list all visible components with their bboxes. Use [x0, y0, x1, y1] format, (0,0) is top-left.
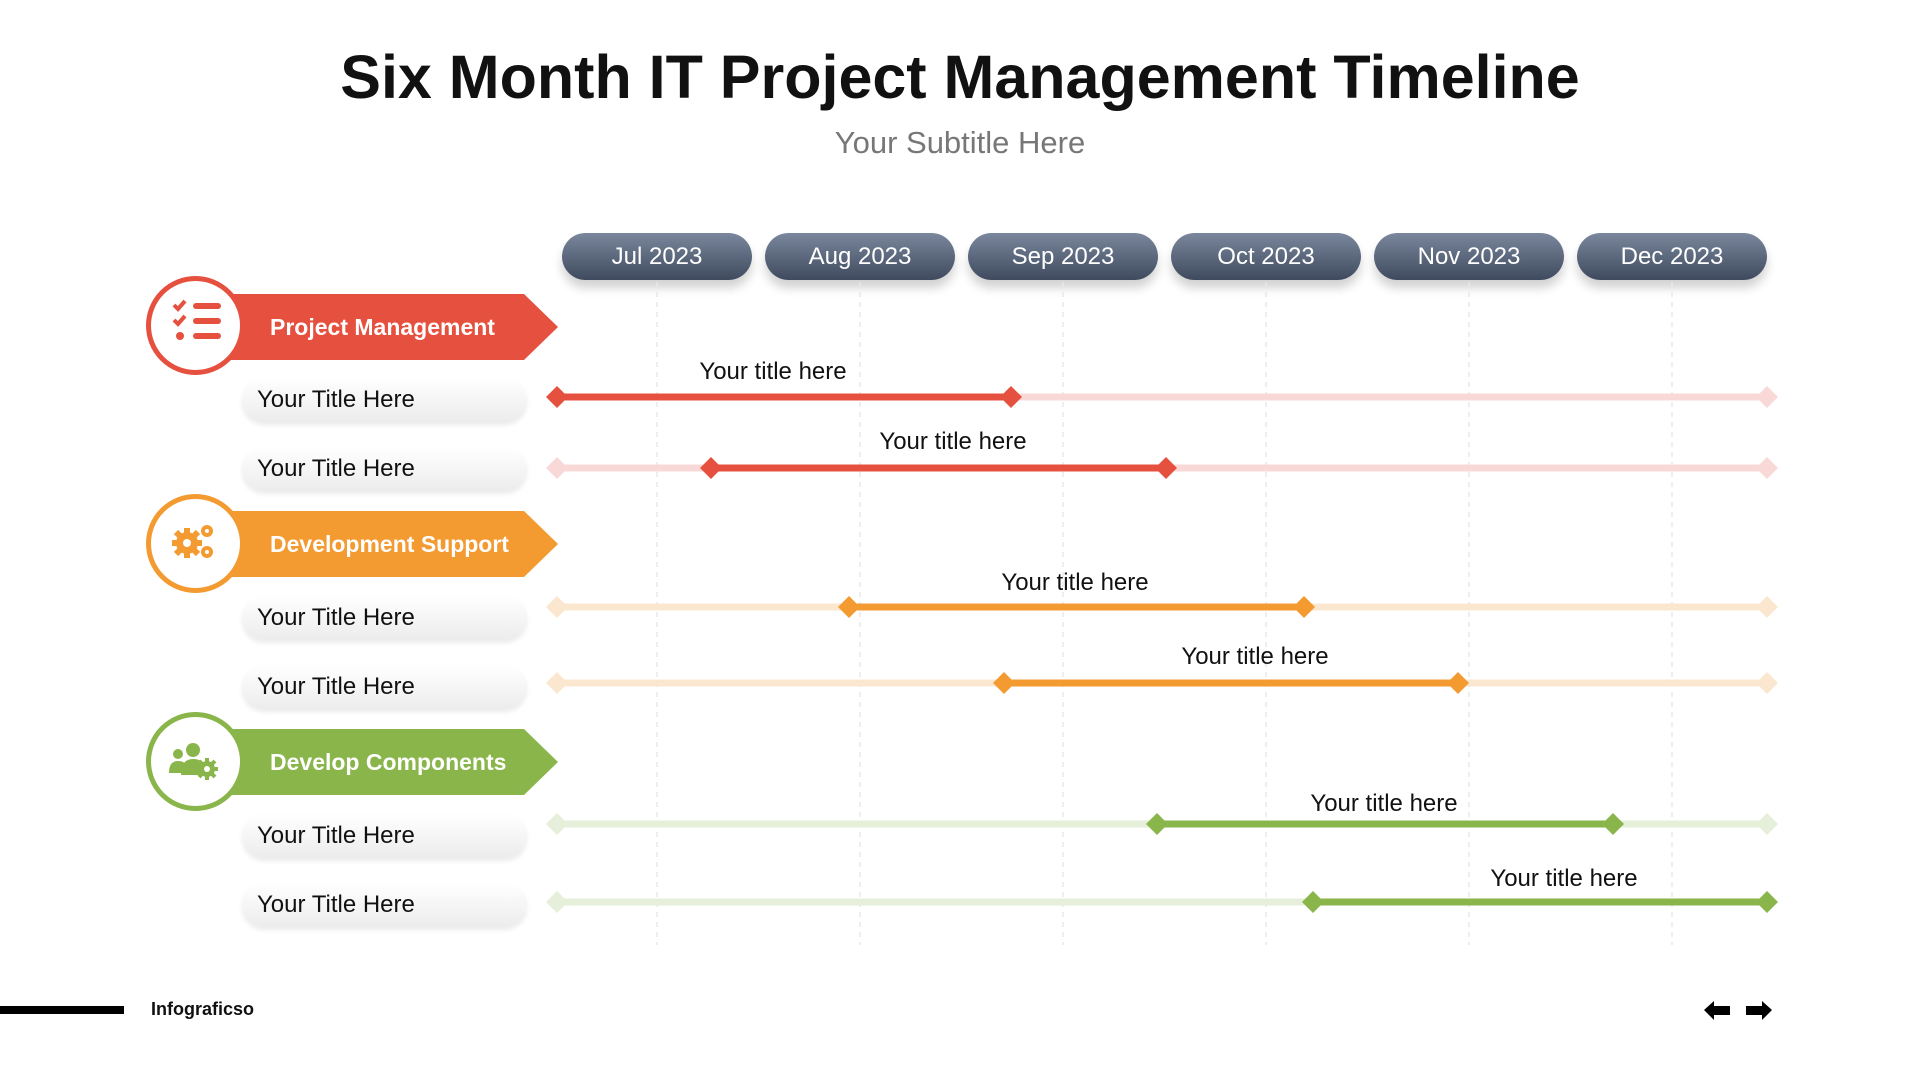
category: Develop Components — [146, 712, 558, 811]
bar: DS 2: Your title here — [1181, 643, 1329, 670]
row label PM1: Your Title Here — [257, 386, 415, 413]
icon: gears — [146, 494, 245, 593]
bar: DC 2: Your title here — [1490, 865, 1638, 892]
category: Development Support — [146, 494, 558, 593]
icon: checklist — [146, 276, 245, 375]
row label DS1: Your Title Here — [257, 604, 415, 631]
row label DS2 — [242, 665, 527, 709]
bar: PM 2 — [546, 428, 1778, 479]
category: Develop Components: Develop Components — [270, 749, 506, 775]
month headers: Oct 2023 — [1217, 243, 1315, 270]
title: Six Month IT Project Management Timeline — [340, 43, 1580, 111]
row label DC1: Your Title Here — [257, 822, 415, 849]
bar: DC 1 — [546, 790, 1778, 835]
bar: PM 1 — [546, 358, 1778, 408]
row label PM2 — [242, 447, 527, 491]
bar: DC 2 — [546, 865, 1778, 913]
bar: PM 1: Your title here — [699, 358, 847, 385]
category: Development Support: Development Support — [270, 531, 509, 557]
month headers: Sep 2023 — [1012, 243, 1114, 270]
month headers: Aug 2023 — [809, 243, 911, 270]
category: Project Management: Project Management — [270, 314, 495, 340]
row label DC2: Your Title Here — [257, 891, 415, 918]
month headers: Jul 2023 — [612, 243, 702, 270]
bar: PM 2: Your title here — [879, 428, 1027, 455]
bar: DC 1: Your title here — [1310, 790, 1458, 817]
month headers: Dec 2023 — [1621, 243, 1723, 270]
footer bar — [0, 1006, 124, 1014]
row label DC2 — [242, 883, 527, 927]
subtitle: Your Subtitle Here — [835, 125, 1085, 160]
bar: DS 2 — [546, 643, 1778, 694]
bar: DS 1: Your title here — [1001, 569, 1149, 596]
icon: team gear — [146, 712, 245, 811]
category: Project Management — [146, 276, 558, 375]
row label PM2: Your Title Here — [257, 455, 415, 482]
icon: nav arrows — [1704, 1001, 1772, 1020]
row label DS1 — [242, 596, 527, 640]
month headers — [558, 233, 1771, 292]
row label DC1 — [242, 814, 527, 858]
row label PM1 — [242, 378, 527, 422]
bar: DS 1 — [546, 569, 1778, 618]
footer brand: Infograficso — [151, 999, 254, 1019]
month headers: Nov 2023 — [1418, 243, 1520, 270]
row label DS2: Your Title Here — [257, 673, 415, 700]
